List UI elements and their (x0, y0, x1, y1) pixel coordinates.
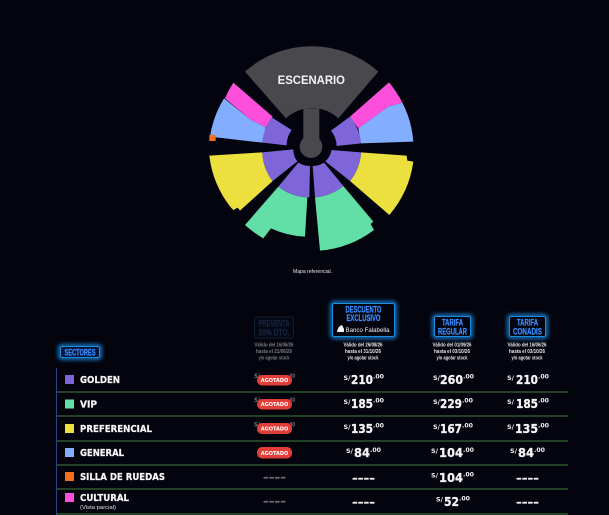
row: silla de ruedas: SILLA DE RUEDAS (80, 472, 165, 483)
row: vip: S/ (254, 396, 261, 404)
row: vip: 229 (440, 396, 462, 411)
row: preferencial: .00 (462, 422, 473, 430)
validity: regular: y/o agotar stock (436, 356, 468, 362)
row: cultural: (Vista parcial) (80, 505, 116, 511)
validity: conadis: y/o agotar stock (512, 356, 543, 362)
row: golden: .00 (373, 372, 384, 380)
stage label: ESCENARIO (278, 73, 345, 87)
validity: descuento (344, 342, 383, 362)
row: golden (65, 372, 549, 387)
header: tarifa conadis: TARIFA (517, 318, 538, 328)
row: general: GENERAL (80, 448, 125, 459)
row: silla de ruedas: ---- (263, 471, 286, 484)
row: vip: .00 (538, 396, 549, 404)
row: cultural: .00 (459, 494, 470, 502)
row: golden: S/ (433, 374, 441, 382)
validity: descuento: Válido del 26/08/26 (344, 342, 383, 348)
row: general: 84 (518, 445, 534, 460)
row: preferencial: PREFERENCIAL (80, 424, 153, 435)
row: silla de ruedas: S/ (431, 472, 439, 480)
row: silla de ruedas: ---- (352, 472, 375, 485)
row: general: S/ (431, 447, 439, 455)
row: golden: S/ (344, 374, 351, 382)
stage (245, 46, 378, 142)
validity: conadis: hasta el 03/10/26 (509, 349, 545, 355)
row: golden: 210 (516, 372, 538, 387)
row: vip: VIP (80, 400, 97, 410)
validity: descuento: y/o agotar stock (348, 356, 379, 362)
row: general: .00 (534, 446, 545, 454)
section: upper left (210, 83, 292, 145)
validity: preventa: hasta el 21/06/26 (256, 349, 292, 355)
row: preferencial (65, 420, 549, 436)
section: bottom left (245, 163, 310, 238)
row: golden: .00 (463, 372, 474, 380)
row: general: S/ (346, 447, 354, 455)
row: preferencial: .00 (288, 420, 295, 428)
map caption: Mapa referencial. (293, 269, 332, 275)
row: cultural: ---- (352, 496, 375, 509)
header: preventa (dimmed): 30% DTO. (258, 328, 290, 338)
row: vip: 185 (351, 396, 373, 411)
row: general: AGOTADO (261, 451, 288, 457)
validity: conadis (508, 342, 547, 362)
header: tarifa conadis (509, 316, 546, 338)
row: preferencial: S/ (344, 423, 351, 431)
row: preferencial: S/ (507, 423, 515, 431)
row: vip: S/ (344, 398, 351, 406)
row: preferencial: AGOTADO (261, 426, 288, 432)
validity: preventa: y/o agotar stock (258, 356, 290, 362)
row: silla de ruedas: ---- (516, 472, 539, 485)
row: vip: S/ (433, 398, 441, 406)
row: preferencial: 135 (515, 421, 538, 436)
validity: regular: Válido del 01/09/26 (432, 342, 472, 348)
row: silla de ruedas (65, 470, 539, 485)
row: general: .00 (370, 446, 381, 454)
row: vip: .00 (462, 396, 473, 404)
icon: wheelchair zone (209, 135, 216, 141)
row: vip: .00 (373, 396, 384, 404)
row: golden: AGOTADO (261, 378, 288, 384)
row: general: 84 (354, 445, 370, 460)
header: preventa (dimmed) (254, 317, 294, 338)
row: golden: .00 (538, 372, 549, 380)
row: vip: .00 (288, 396, 295, 404)
header: tarifa conadis: CONADIS (513, 326, 542, 338)
row: preferencial: .00 (538, 422, 549, 430)
validity: conadis: Válido del 16/06/26 (508, 342, 547, 348)
row: golden: GOLDEN (80, 375, 120, 386)
row: golden: 260 (440, 372, 463, 387)
header: descuento exclusivo (332, 303, 395, 337)
row: golden: S/ (254, 372, 261, 380)
header: tarifa regular: REGULAR (438, 326, 467, 338)
row: cultural: ---- (516, 496, 539, 509)
header: sectores: SECTORES (64, 348, 96, 358)
row: vip: AGOTADO (261, 402, 288, 408)
validity: regular (432, 342, 472, 362)
header: descuento exclusivo: EXCLUSIVO (346, 313, 380, 324)
validity: preventa: Válido del 16/06/26 (254, 342, 294, 348)
row: general: 104 (439, 445, 463, 460)
row: preferencial: .00 (373, 422, 384, 430)
validity: descuento: hasta el 31/10/26 (345, 349, 381, 355)
row: golden: .00 (288, 372, 295, 380)
validity: preventa (254, 342, 294, 362)
row: general: .00 (463, 446, 474, 454)
header: tarifa regular (434, 316, 471, 338)
seating map (209, 46, 413, 251)
header: descuento exclusivo: Banco Falabella (346, 327, 390, 334)
table frame (56, 368, 568, 515)
row: preferencial: S/ (254, 420, 261, 428)
section: lower right (325, 150, 413, 215)
row: cultural: S/ (436, 496, 444, 504)
row: preferencial: 135 (351, 421, 373, 436)
section: lower left (209, 149, 297, 211)
row: general (65, 445, 545, 460)
row: general: S/ (510, 447, 518, 455)
row: cultural: CULTURAL (80, 493, 130, 504)
row: silla de ruedas: 104 (439, 470, 463, 485)
row: silla de ruedas: .00 (463, 470, 474, 478)
header: tarifa regular: TARIFA (442, 318, 463, 328)
header: sectores (60, 346, 100, 358)
row: cultural (65, 493, 539, 511)
section: bottom right (313, 163, 374, 251)
row: golden: 210 (351, 372, 373, 387)
validity: regular: hasta el 03/10/26 (434, 349, 470, 355)
stage hub (300, 135, 322, 158)
header: preventa (dimmed): PREVENTA (258, 318, 290, 330)
row: vip (65, 396, 549, 411)
row: vip: S/ (507, 398, 515, 406)
row: preferencial: S/ (433, 423, 441, 431)
row: cultural: ---- (263, 495, 286, 508)
row: preferencial: 167 (440, 421, 462, 436)
section: upper right (331, 82, 413, 146)
row: vip: 185 (516, 396, 538, 411)
header: descuento exclusivo: DESCUENTO (346, 304, 382, 316)
row: cultural: 52 (444, 494, 459, 509)
row: golden: S/ (507, 374, 515, 382)
